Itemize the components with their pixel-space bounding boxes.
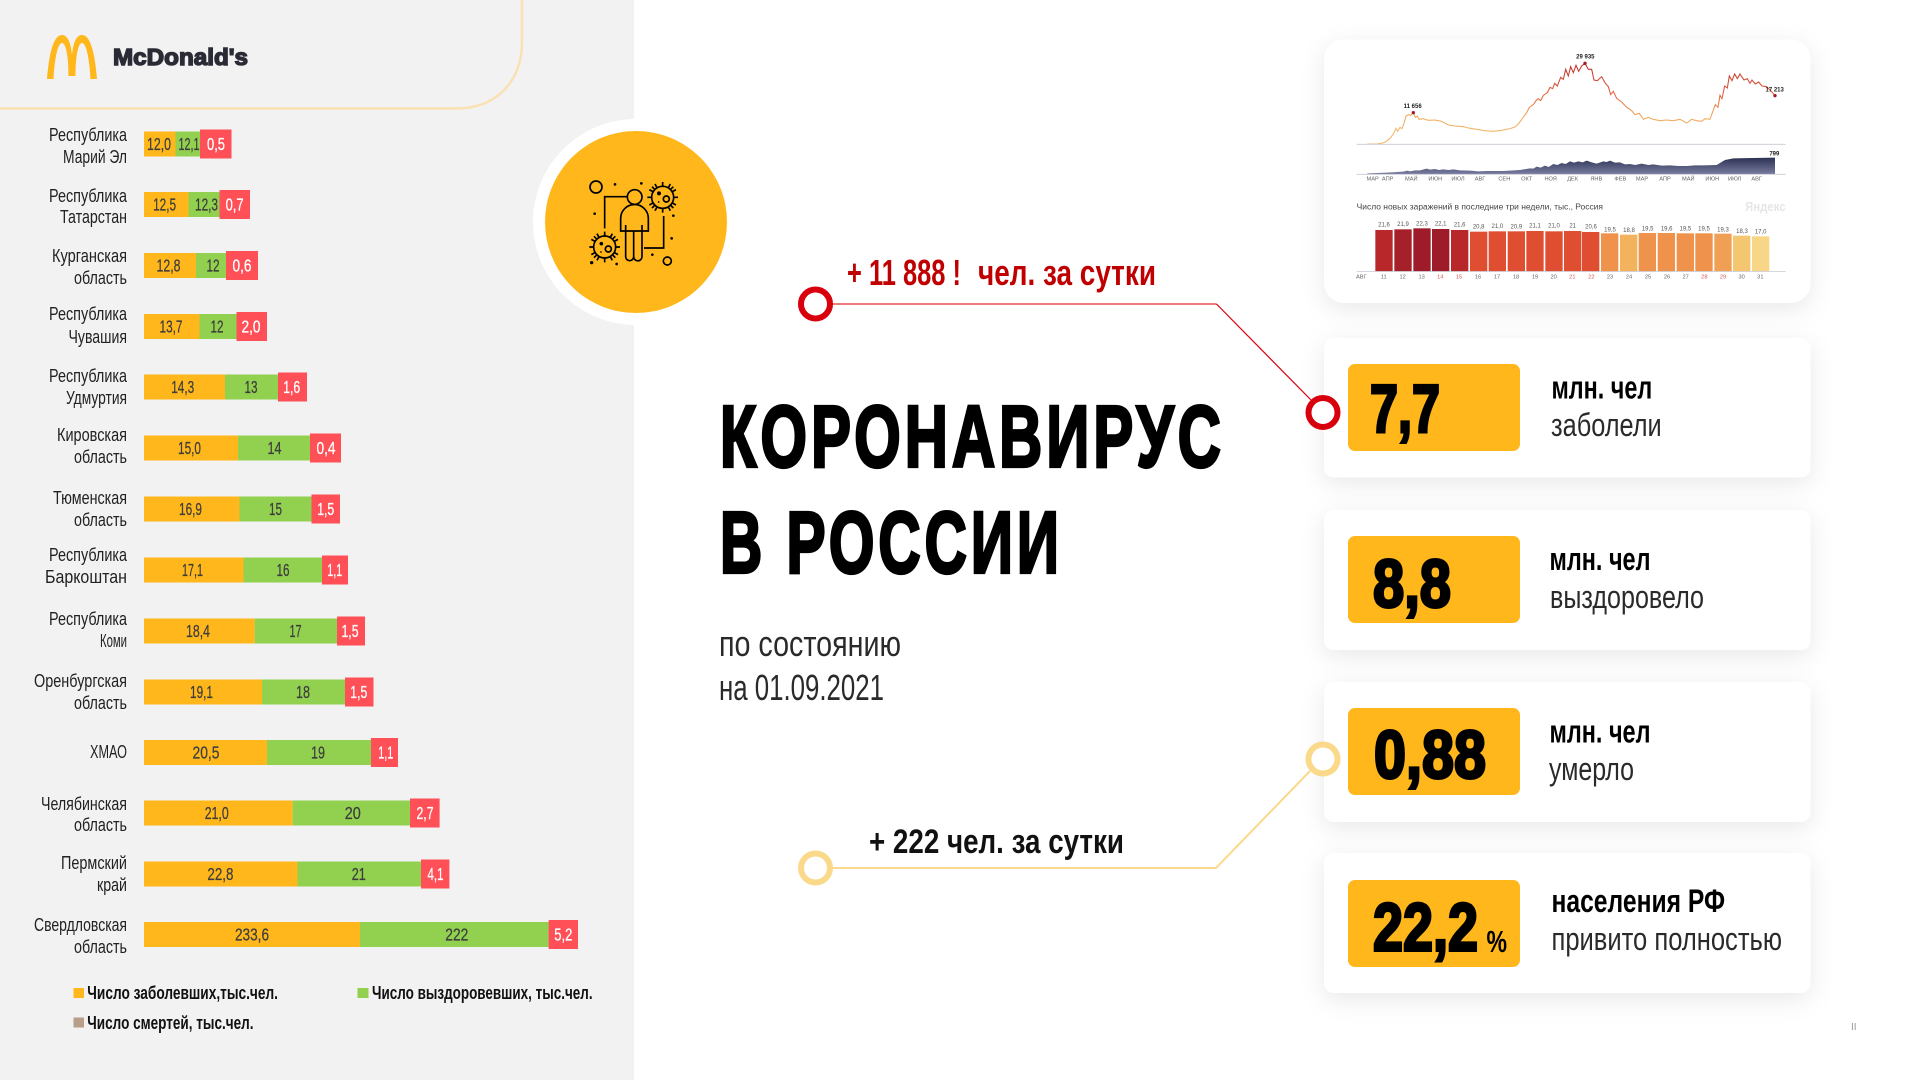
callout: new deaths xyxy=(801,744,1338,882)
icon: person with viruses xyxy=(589,181,678,265)
number chip: 8,8 xyxy=(1348,536,1520,623)
row: Челябинская область: 20 xyxy=(345,803,361,823)
card text: выздоровело xyxy=(1550,579,1704,615)
month axis labels: ЯНВ xyxy=(1590,177,1603,183)
row: Челябинская область: 21,0 xyxy=(205,803,229,823)
row: Курганская область: 12 xyxy=(206,256,220,276)
legend item: заболевшие: Число заболевших,тыс.чел. xyxy=(87,983,278,1003)
row: Республика Коми: 18,4 xyxy=(186,621,210,641)
row: Республика Коми: Республика xyxy=(49,609,128,629)
bar chart: last three weeks: 22,1 xyxy=(1435,222,1447,228)
card text xyxy=(1551,370,1662,443)
row: Республика Баркоштан: Республика xyxy=(49,545,128,565)
row: Челябинская область: область xyxy=(74,815,127,835)
badge: virus icon circle xyxy=(533,119,739,325)
bar chart: regions xyxy=(34,125,578,957)
row: Свердловская область: Свердловская xyxy=(34,915,127,935)
line chart: new cases: 17 213 xyxy=(1766,87,1784,93)
bar chart: last three weeks: 11 xyxy=(1381,275,1387,281)
row: Свердловская область: область xyxy=(74,937,127,957)
card text: привито полностью xyxy=(1552,921,1782,957)
month axis labels: ФЕВ xyxy=(1614,177,1626,183)
subtitle: date xyxy=(719,623,901,708)
card text: заболели xyxy=(1551,407,1662,443)
bar chart: last three weeks: 28 xyxy=(1701,275,1707,281)
month axis labels xyxy=(1367,175,1762,183)
bar chart: last three weeks: 21,0 xyxy=(1492,224,1504,230)
bar chart: last three weeks: 13 xyxy=(1419,275,1425,281)
row: Республика Чувашия: 2,0 xyxy=(242,316,261,336)
row: Курганская область: 12,8 xyxy=(156,256,180,276)
row: Республика Удмуртия: 13 xyxy=(244,377,258,397)
row: Оренбургская область: Оренбургская xyxy=(34,671,127,691)
month axis labels: МАР xyxy=(1636,177,1648,183)
month axis labels: ИЮН xyxy=(1428,177,1442,183)
row: Республика Татарстан: 12,3 xyxy=(195,194,218,214)
row: Тюменская область: 1,5 xyxy=(317,499,334,519)
row: Республика Удмуртия: Республика xyxy=(49,366,128,386)
row: Курганская область: Курганская xyxy=(52,246,127,266)
number chip: 0,88 xyxy=(1348,708,1520,795)
row: Оренбургская область xyxy=(34,671,374,713)
bar chart: last three weeks: 17 xyxy=(1494,275,1500,281)
bar chart: last three weeks: 18,3 xyxy=(1736,229,1748,235)
card text: млн. чел xyxy=(1552,370,1652,406)
number chip: 8,8: 8,8 xyxy=(1373,546,1451,622)
bar chart: last three weeks: 20,9 xyxy=(1511,224,1523,230)
bar chart: last three weeks: 18,8 xyxy=(1623,228,1635,234)
row: Республика Баркоштан xyxy=(45,545,348,587)
month axis labels: ИЮЛ xyxy=(1728,177,1742,183)
card text xyxy=(1550,541,1704,615)
row: Кировская область: область xyxy=(74,447,127,467)
row: Республика Марий Эл: 12,1 xyxy=(178,134,200,154)
logo: McDonald's xyxy=(47,35,248,79)
row: Свердловская область xyxy=(34,915,578,957)
chart subtitle: Число новых заражений в последние три недели, тыс., Россия xyxy=(1357,201,1603,211)
legend item: выздоровевшие: Число выздоровевших, тыс.чел. xyxy=(372,983,593,1003)
month axis labels: МАЙ xyxy=(1682,175,1695,183)
row: Республика Чувашия: Республика xyxy=(49,304,128,324)
row: Республика Чувашия: 13,7 xyxy=(160,316,182,336)
row: Кировская область: 15,0 xyxy=(178,438,201,458)
card text: млн. чел xyxy=(1550,714,1650,750)
row: Пермский край xyxy=(61,853,449,895)
row: Республика Баркоштан: 1,1 xyxy=(327,560,342,580)
bar chart: last three weeks: 19,5 xyxy=(1698,227,1710,233)
title xyxy=(720,388,1225,592)
month axis labels: ИЮЛ xyxy=(1451,177,1465,183)
bar chart: last three weeks: 14 xyxy=(1437,275,1443,281)
row: Республика Татарстан: 12,5 xyxy=(153,194,176,214)
month axis labels: АВГ xyxy=(1475,177,1485,183)
row: ХМАО: 20,5 xyxy=(192,742,220,762)
number chip: 22,2 %: % xyxy=(1486,924,1507,959)
bar chart: last three weeks: 23 xyxy=(1607,275,1613,281)
card: привито xyxy=(1324,853,1810,993)
bar chart: last three weeks: АВГ xyxy=(1356,275,1367,281)
bar chart: last three weeks: 17,0 xyxy=(1755,230,1767,236)
row: Курганская область: 0,6 xyxy=(232,256,252,276)
number chip: 0,88: 0,88 xyxy=(1374,717,1486,793)
line chart: new cases xyxy=(1357,54,1786,144)
month axis labels: СЕН xyxy=(1498,177,1510,183)
bar chart: last three weeks: 22 xyxy=(1588,275,1594,281)
row: Республика Татарстан xyxy=(49,186,250,227)
row: Оренбургская область: 19,1 xyxy=(190,682,213,702)
bar chart: last three weeks: 19,5 xyxy=(1604,227,1616,233)
bar chart: last three weeks: 16 xyxy=(1475,275,1481,281)
bar chart: last three weeks: 31 xyxy=(1757,275,1763,281)
marker: right red ring xyxy=(1308,398,1338,427)
bar chart: last three weeks: 19,6 xyxy=(1661,227,1673,233)
bar chart: last three weeks: 22,3 xyxy=(1416,221,1428,227)
row: Республика Баркоштан: Баркоштан xyxy=(45,567,127,587)
row: Кировская область xyxy=(57,425,341,467)
row: Курганская область: область xyxy=(74,268,127,288)
area chart: deaths: 799 xyxy=(1769,151,1780,157)
row: Тюменская область: 15 xyxy=(269,499,282,519)
month axis labels: ДЕК xyxy=(1567,177,1579,183)
subtitle: date: по состоянию xyxy=(719,623,901,664)
row: Республика Чувашия: Чувашия xyxy=(68,327,127,347)
row: Республика Удмуртия: 14,3 xyxy=(171,377,194,397)
row: Республика Коми: 17 xyxy=(290,621,302,641)
bar chart: last three weeks: 19,3 xyxy=(1717,227,1729,233)
watermark: Яндекс: Яндекс xyxy=(1745,200,1786,214)
month axis labels: ОКТ xyxy=(1521,177,1533,183)
number chip: 7,7 xyxy=(1348,364,1520,451)
bar chart: last three weeks: 12 xyxy=(1400,275,1406,281)
row: Республика Баркоштан: 17,1 xyxy=(182,560,203,580)
row: Свердловская область: 5,2 xyxy=(554,924,572,944)
month axis labels: ИЮН xyxy=(1705,177,1719,183)
row: Свердловская область: 222 xyxy=(445,924,468,944)
bar chart: last three weeks: 20,8 xyxy=(1473,224,1485,230)
area chart: deaths xyxy=(1357,151,1786,174)
card: заболели xyxy=(1324,338,1810,478)
logo wordmark: McDonald's xyxy=(113,44,248,70)
bar chart: last three weeks: 29 xyxy=(1720,275,1726,281)
bar chart: last three weeks: 19,5 xyxy=(1680,227,1692,233)
row: Республика Коми: 1,5 xyxy=(342,621,358,641)
row: Республика Чувашия xyxy=(49,304,267,347)
month axis labels: АВГ xyxy=(1751,177,1762,183)
row: Тюменская область xyxy=(53,488,340,530)
row: Оренбургская область: 1,5 xyxy=(350,682,367,702)
row: Республика Удмуртия: Удмуртия xyxy=(66,388,127,408)
page number mark: II xyxy=(1851,1022,1857,1033)
card: умерло xyxy=(1324,682,1810,822)
row: Оренбургская область: область xyxy=(74,693,127,713)
card text: умерло xyxy=(1549,751,1634,787)
bar chart: last three weeks: 30 xyxy=(1739,275,1745,281)
row: Оренбургская область: 18 xyxy=(296,682,310,702)
line chart: new cases: 29 935 xyxy=(1576,54,1595,60)
bar chart: last three weeks: 24 xyxy=(1626,275,1632,281)
row: Республика Удмуртия xyxy=(49,366,307,408)
icon: golden arches xyxy=(47,35,97,79)
row: Кировская область: Кировская xyxy=(57,425,127,445)
bar chart: last three weeks: 21 xyxy=(1569,224,1577,230)
bar chart: last three weeks: 26 xyxy=(1664,275,1670,281)
row: Республика Коми xyxy=(49,609,365,651)
row: ХМАО xyxy=(90,738,398,767)
bar chart: last three weeks: 19,5 xyxy=(1642,227,1654,233)
number chip: 22,2 % xyxy=(1348,880,1520,967)
row: Республика Баркоштан: 16 xyxy=(276,560,290,580)
marker: left red ring xyxy=(801,290,830,318)
bar chart: last three weeks: 27 xyxy=(1683,275,1689,281)
row: Пермский край: край xyxy=(97,875,127,895)
bar chart: last three weeks: 19 xyxy=(1532,275,1538,281)
row: Пермский край: 21 xyxy=(352,864,366,884)
row: Тюменская область: Тюменская xyxy=(53,488,127,508)
marker: right yellow ring xyxy=(1308,744,1338,774)
decorative header outline xyxy=(0,0,522,108)
row: Республика Марий Эл xyxy=(49,125,232,167)
number chip: 7,7: 7,7 xyxy=(1370,371,1440,447)
bar chart: last three weeks: 21,6 xyxy=(1454,223,1466,229)
bar chart: last three weeks: 21,9 xyxy=(1397,222,1409,228)
month axis labels: МАР xyxy=(1367,177,1379,183)
callout text: чел. за сутки xyxy=(978,252,1156,293)
row: Республика Марий Эл: 0,5 xyxy=(207,134,225,154)
row: Кировская область: 14 xyxy=(268,438,282,458)
row: Республика Марий Эл: Республика xyxy=(49,125,128,145)
card text: млн. чел xyxy=(1550,541,1650,577)
callout text xyxy=(847,252,1156,293)
card text: населения РФ xyxy=(1552,883,1725,919)
row: Кировская область: 0,4 xyxy=(316,438,336,458)
line chart: new cases: 11 656 xyxy=(1404,104,1422,110)
bar chart: last three weeks: 21 xyxy=(1569,275,1575,281)
title: В РОССИИ xyxy=(720,494,1063,592)
legend item: смерти: Число смертей, тыс.чел. xyxy=(87,1013,254,1033)
bar chart: last three weeks: 21,1 xyxy=(1529,224,1541,230)
row: Свердловская область: 233,6 xyxy=(235,924,269,944)
row: Республика Чувашия: 12 xyxy=(210,316,224,336)
row: Республика Татарстан: 0,7 xyxy=(226,194,244,214)
number chip: 22,2 %: 22,2 xyxy=(1373,890,1478,966)
bar chart: last three weeks: 15 xyxy=(1456,275,1462,281)
row: Пермский край: 22,8 xyxy=(207,864,233,884)
row: ХМАО: 1,1 xyxy=(378,742,393,762)
bar chart: last three weeks: 21,0 xyxy=(1548,224,1560,230)
card: выздоровело xyxy=(1324,510,1810,650)
row: Республика Марий Эл: 12,0 xyxy=(147,134,171,154)
month axis labels: АПР xyxy=(1659,177,1671,183)
connector line: red xyxy=(832,303,1216,305)
row: Республика Марий Эл: Марий Эл xyxy=(63,147,127,167)
row: Челябинская область: 2,7 xyxy=(416,803,434,823)
callout text: + 11 888 ! xyxy=(847,252,961,293)
row: Челябинская область: Челябинская xyxy=(41,794,127,814)
row: Республика Коми: Коми xyxy=(100,631,127,651)
row: ХМАО: ХМАО xyxy=(90,742,127,762)
callout: new cases xyxy=(801,252,1338,427)
subtitle: date: на 01.09.2021 xyxy=(719,667,884,708)
bar chart: last three weeks: 21,6 xyxy=(1378,223,1390,229)
bar chart: last three weeks xyxy=(1356,221,1786,281)
month axis labels: НОЯ xyxy=(1544,177,1557,183)
row: Республика Татарстан: Республика xyxy=(49,186,128,206)
title: КОРОНАВИРУС xyxy=(720,388,1225,486)
card text xyxy=(1549,714,1650,787)
row: Челябинская область xyxy=(41,794,440,835)
row: Пермский край: Пермский xyxy=(61,853,127,873)
month axis labels: АПР xyxy=(1382,177,1394,183)
row: Тюменская область: область xyxy=(74,510,127,530)
panel: chart card xyxy=(1324,40,1810,303)
row: Курганская область xyxy=(52,246,258,288)
bar chart: last three weeks: 25 xyxy=(1645,275,1651,281)
row: Пермский край: 4,1 xyxy=(428,864,444,884)
card text xyxy=(1552,883,1782,957)
row: Республика Удмуртия: 1,6 xyxy=(283,377,300,397)
legend xyxy=(74,983,593,1033)
bar chart: last three weeks: 20 xyxy=(1551,275,1557,281)
connector line: yellow xyxy=(832,771,1310,868)
month axis labels: МАЙ xyxy=(1405,175,1418,183)
row: ХМАО: 19 xyxy=(311,742,325,762)
bar chart: last three weeks: 18 xyxy=(1513,275,1519,281)
bar chart: last three weeks: 20,6 xyxy=(1585,225,1597,231)
panel: left background xyxy=(0,0,634,1080)
row: Республика Татарстан: Татарстан xyxy=(60,207,127,227)
row: Тюменская область: 16,9 xyxy=(179,499,202,519)
callout text: + 222 чел. за сутки xyxy=(869,823,1124,861)
marker: left yellow ring xyxy=(801,854,830,882)
